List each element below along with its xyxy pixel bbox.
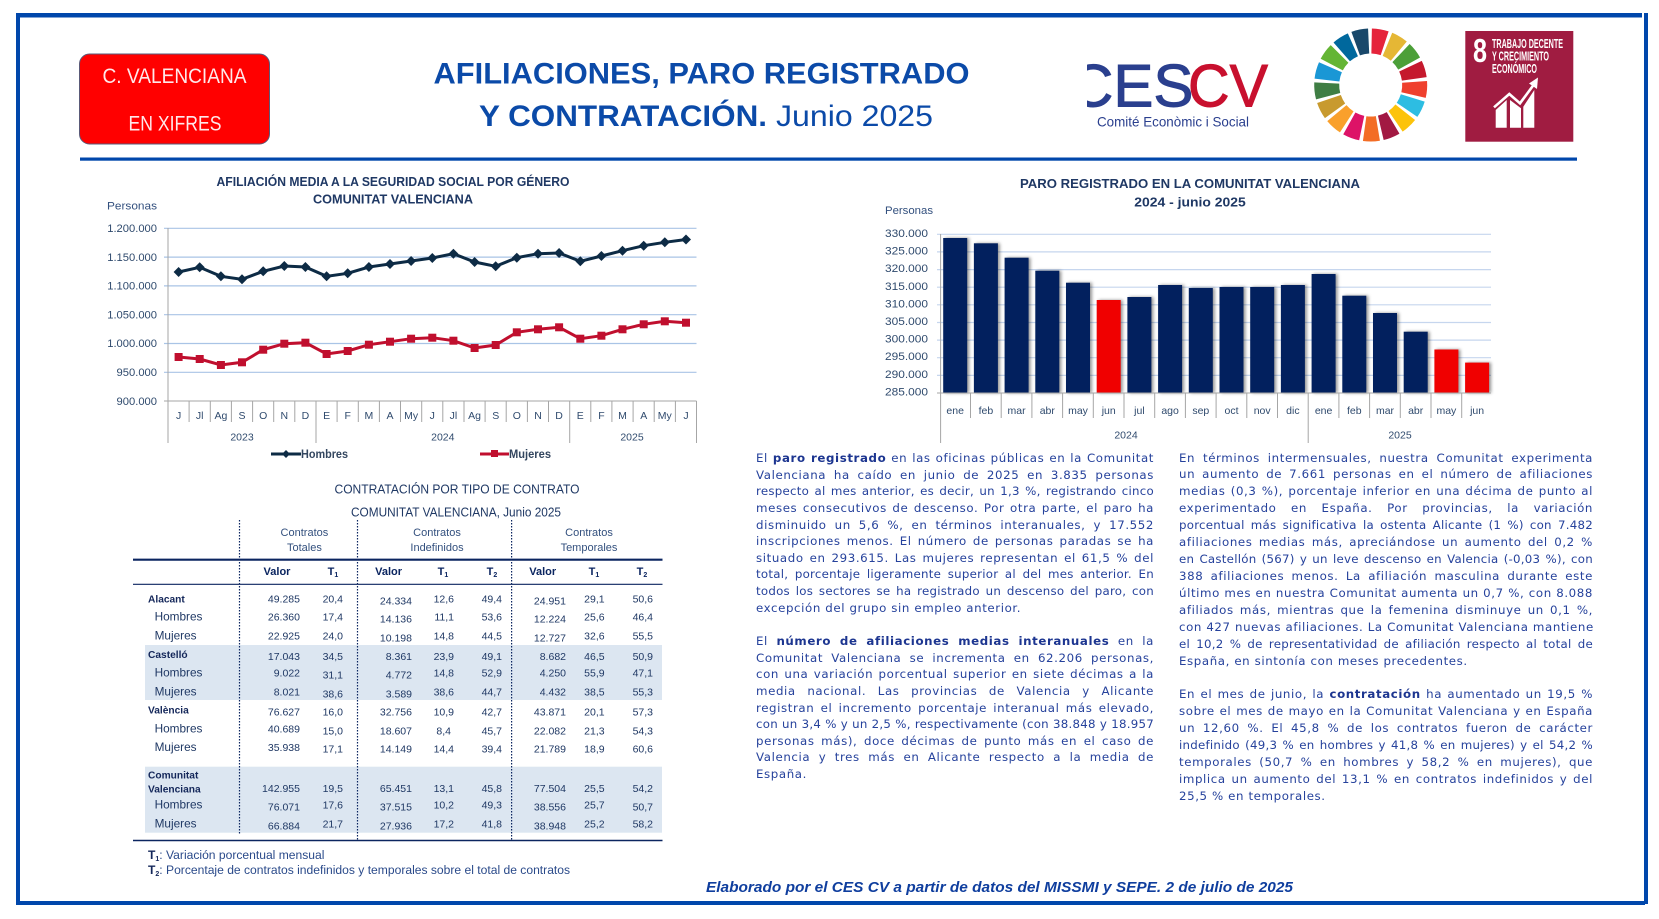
- table values: 49,1: [482, 651, 502, 663]
- table values: 8.021: [274, 687, 300, 699]
- table values: 66.884: [268, 821, 300, 833]
- table values: 9.022: [274, 668, 300, 680]
- table: contratación por tipo de contrato: 2: [643, 572, 647, 579]
- table values: 22.082: [534, 726, 566, 738]
- table values: 8.361: [386, 651, 412, 663]
- table values: 25,2: [584, 819, 605, 831]
- table values: 29,1: [584, 593, 605, 605]
- table values: 24.334: [380, 596, 412, 608]
- table values: 38,6: [434, 687, 454, 699]
- table values: 38.948: [534, 821, 566, 833]
- table values: 17,2: [434, 819, 454, 831]
- icon: SDG 8 tile: [1465, 31, 1573, 142]
- line chart heading: AFILIACIÓN MEDIA A LA SEGURIDAD SOCIAL POR GÉNERO: [216, 174, 570, 189]
- table: contratación por tipo de contrato: [133, 481, 662, 878]
- table values: 46,4: [633, 612, 653, 624]
- table values: 18,9: [584, 744, 605, 756]
- line chart month labels: Jl: [196, 410, 203, 422]
- table values: 21,3: [584, 726, 605, 738]
- table: contratación por tipo de contrato: T: [438, 566, 444, 578]
- table row labels: Mujeres: [155, 685, 197, 699]
- table: contratación por tipo de contrato: 2: [493, 572, 497, 579]
- bar chart month labels: jun: [1101, 405, 1116, 417]
- table values: 20,4: [323, 593, 343, 605]
- table values: 17.043: [268, 651, 300, 663]
- line chart month labels: M: [365, 410, 373, 422]
- table values: 77.504: [534, 783, 566, 795]
- table values: 45,8: [482, 783, 502, 795]
- table values: 10.198: [380, 633, 412, 645]
- line chart month labels: My: [404, 410, 419, 422]
- bar chart y axis labels: 300.000: [885, 334, 928, 346]
- table heading: [334, 481, 580, 519]
- bar chart month labels: oct: [1224, 405, 1239, 417]
- table values: 57,3: [633, 707, 653, 719]
- table row labels: Mujeres: [155, 817, 197, 831]
- table values: 16,0: [323, 707, 343, 719]
- table values: 43.871: [534, 707, 566, 719]
- table values: 4.432: [540, 687, 566, 699]
- bar chart month labels: ene: [946, 405, 964, 417]
- text block: términos intermensuales: [1179, 450, 1594, 668]
- table values: 50,6: [633, 593, 653, 605]
- bar chart month labels: mar: [1008, 405, 1026, 417]
- text block: afiliaciones medias: Valencia y tres más en Alicante respecto a la media de: [756, 750, 1154, 764]
- table heading: CONTRATACIÓN POR TIPO DE CONTRATO: [334, 481, 580, 496]
- table values: 45,7: [482, 726, 502, 738]
- table values: 25,7: [584, 800, 605, 812]
- table values: 39,4: [482, 744, 502, 756]
- bar chart heading: [1020, 176, 1361, 209]
- table: contratación por tipo de contrato: 1: [444, 572, 448, 579]
- bar chart month labels: may: [1068, 405, 1089, 417]
- series: Mujeres: [179, 321, 686, 365]
- table values: 14.149: [380, 744, 412, 756]
- table values: 32,6: [584, 631, 605, 643]
- line chart y axis labels: 1.100.000: [107, 281, 157, 293]
- bar chart month labels: ene: [1315, 405, 1333, 417]
- table values: 13,1: [434, 783, 454, 795]
- table values: 44,7: [482, 687, 502, 699]
- table footnotes: : Porcentaje de contratos indefinidos y temporales sobre el total de contratos: [159, 863, 570, 877]
- table: contratación por tipo de contrato: T: [637, 566, 643, 578]
- bar chart y axis labels: 305.000: [885, 316, 928, 328]
- table: contratación por tipo de contrato: Valor: [375, 566, 403, 578]
- table row labels: Comunitat: [148, 771, 199, 782]
- text block: contratación: sobre el mes de mayo en la Comunitat Valenciana y en España: [1179, 704, 1593, 718]
- table values: 20,1: [584, 707, 605, 719]
- bar chart y axis labels: 325.000: [885, 246, 928, 258]
- text block: afiliaciones medias: [756, 634, 1154, 781]
- table column headers: Totales: [287, 542, 322, 554]
- table values: 38,6: [323, 688, 343, 700]
- table values: 49,4: [482, 593, 502, 605]
- table row labels: Alacant: [148, 595, 185, 606]
- table values: 53,6: [482, 612, 502, 624]
- line chart month labels: O: [259, 410, 267, 422]
- table footnotes: T: [148, 863, 159, 878]
- line chart month labels: D: [555, 410, 563, 422]
- text block: afiliaciones medias: con un 3,4 % y un 2,5 %, respectivamente (con 38.848 y 18.957: [756, 717, 1154, 731]
- table values: 12,6: [434, 593, 454, 605]
- text block: afiliaciones medias: El número de afiliaciones medias interanuales en la: [756, 634, 1154, 648]
- table values: 11,1: [434, 612, 454, 624]
- table values: 21.789: [534, 744, 566, 756]
- line chart month labels: O: [513, 410, 521, 422]
- table values: 14,8: [434, 631, 454, 643]
- bars: [943, 238, 1489, 393]
- line chart month labels: J: [683, 410, 689, 422]
- table: contratación por tipo de contrato: T: [487, 566, 493, 578]
- table values: 24.951: [534, 596, 566, 608]
- line chart month labels: 2024: [431, 432, 455, 444]
- table row labels: Hombres: [155, 798, 203, 812]
- text block: términos intermensuales: 388 afiliaciones menos. La afiliación masculina durante este: [1179, 569, 1593, 583]
- table values: 49.285: [268, 593, 300, 605]
- table values: 41,8: [482, 819, 502, 831]
- line chart month labels: 2025: [620, 432, 644, 444]
- table row labels: Hombres: [155, 610, 203, 624]
- table column headers: Contratos: [565, 527, 613, 539]
- text block: paro registrado: todos los sectores se ha registrado un descenso del paro, con: [756, 584, 1154, 598]
- logo: CES CV: [1087, 64, 1268, 126]
- line chart legend: Mujeres: [509, 449, 551, 461]
- table values: 38.556: [534, 802, 566, 814]
- line chart y axis labels: 1.050.000: [107, 309, 157, 321]
- text block: términos intermensuales: afiliaciones medias más, apreciándose un aumento del 0,2 %: [1179, 535, 1593, 549]
- bar chart: paro registrado: [885, 176, 1491, 443]
- text block: contratación: indefinido (49,3 % en hombres y 41,8 % en mujeres) y el 54,2 %: [1179, 738, 1593, 752]
- line chart month labels: F: [344, 410, 351, 422]
- line chart month labels: [176, 410, 689, 444]
- line chart month labels: Ag: [214, 410, 227, 422]
- bar chart y axis labels: 310.000: [885, 298, 928, 310]
- text block: términos intermensuales: medias (0,3 %), porcentaje inferior en una décima de punto al: [1179, 484, 1593, 498]
- table row labels: Mujeres: [155, 740, 197, 754]
- table values: 47,1: [633, 668, 653, 680]
- text block: contratación: temporales (50,7 % en hombres y 58,2 % en mujeres), que: [1179, 755, 1593, 769]
- table footnotes: T: [148, 848, 159, 863]
- table values: 54,2: [633, 783, 653, 795]
- bar chart month labels: sep: [1192, 405, 1209, 417]
- bar chart month labels: jun: [1469, 405, 1484, 417]
- line chart y axis labels: 950.000: [117, 367, 157, 379]
- table values: 31,1: [323, 670, 343, 682]
- text block: paro registrado: situado en 293.615. Las mujeres representan el 61,5 % del: [756, 551, 1154, 565]
- icon: SDG 8 tile: 8: [1473, 32, 1487, 69]
- line chart y axis labels: 1.200.000: [107, 223, 157, 235]
- bar chart heading: PARO REGISTRADO EN LA COMUNITAT VALENCIANA: [1020, 176, 1361, 191]
- line chart month labels: S: [238, 410, 246, 422]
- badge: C. Valenciana en xifres: [80, 54, 270, 144]
- table values: 10,9: [434, 707, 454, 719]
- text block: paro registrado: El paro registrado en las oficinas públicas en la Comunitat: [756, 451, 1154, 465]
- table values: 8.682: [540, 651, 566, 663]
- line chart month labels: S: [492, 410, 499, 422]
- table column headers: [281, 527, 618, 554]
- table column headers: Contratos: [281, 527, 329, 539]
- table values: 55,3: [633, 687, 653, 699]
- table row labels: Valenciana: [148, 785, 201, 796]
- line chart month labels: Jl: [450, 410, 457, 422]
- icon: SDG colour wheel: [1308, 23, 1433, 147]
- table values: 52,9: [482, 668, 502, 680]
- text block: términos intermensuales: en Castellón (567) y un leve descenso en Valencia (-0,03 %), con: [1179, 552, 1593, 566]
- table values: 25,5: [584, 783, 605, 795]
- table values: 14.136: [380, 614, 412, 626]
- bar chart heading: 2024 - junio 2025: [1134, 194, 1246, 209]
- table values: 3.589: [386, 688, 412, 700]
- text block: paro registrado: [756, 451, 1154, 615]
- table row labels: Hombres: [155, 722, 203, 736]
- table footnotes: 2: [155, 871, 159, 878]
- text block: términos intermensuales: España, en sintonía con meses precedentes.: [1179, 654, 1468, 668]
- line chart legend: Hombres: [301, 449, 348, 461]
- table values: 76.071: [268, 802, 300, 814]
- bar chart y axis labels: 285.000: [885, 386, 928, 398]
- footer source note: Elaborado por el CES CV a partir de datos del MISSMI y SEPE. 2 de julio de 2025: [706, 880, 1294, 896]
- line chart y axis labels: [107, 201, 157, 408]
- table values: 22.925: [268, 631, 300, 643]
- table values: 65.451: [380, 783, 412, 795]
- table row labels: València: [148, 706, 189, 717]
- table values: 19,5: [323, 783, 343, 795]
- bar chart month labels: mar: [1376, 405, 1395, 417]
- table values: 8,4: [436, 726, 451, 738]
- table: contratación por tipo de contrato: T: [328, 566, 334, 578]
- table values: 21,7: [323, 819, 343, 831]
- bar chart y axis labels: 295.000: [885, 351, 928, 363]
- line chart month labels: J: [430, 410, 435, 422]
- table values: 25,6: [584, 612, 605, 624]
- table values: 38,5: [584, 687, 605, 699]
- text block: términos intermensuales: un aumento de 7.661 personas en el número de afiliaciones: [1179, 467, 1593, 481]
- table footnotes: [148, 848, 570, 878]
- table values: 10,2: [434, 800, 454, 812]
- line chart y axis labels: Personas: [107, 201, 157, 213]
- text block: afiliaciones medias: Comunitat Valenciana se incrementa en 62.206 personas,: [756, 651, 1154, 665]
- badge: C. Valenciana en xifres: EN XIFRES: [128, 112, 222, 136]
- table values: 24,0: [323, 631, 343, 643]
- table values: 44,5: [482, 631, 502, 643]
- table values: 17,4: [323, 612, 343, 624]
- bar chart month labels: may: [1436, 405, 1457, 417]
- text block: términos intermensuales: con 427 nuevas afiliaciones. La Comunitat Valenciana mantiene: [1179, 620, 1594, 634]
- table values: 12.727: [534, 633, 566, 645]
- table row labels: Castelló: [148, 650, 188, 661]
- logo: CES CV: CES: [1070, 52, 1193, 120]
- text block: contratación: un 12,60 %. El 45,8 % de los contratos fueron de carácter: [1179, 721, 1593, 735]
- text block: paro registrado: Valenciana ha caído en junio de 2025 en 3.835 personas: [756, 468, 1154, 482]
- table: contratación por tipo de contrato: 1: [334, 572, 338, 579]
- table values: 14,8: [434, 668, 454, 680]
- table values: 55,9: [584, 668, 605, 680]
- text block: contratación: implica un aumento del 13,1 % en contratos indefinidos y del: [1179, 772, 1593, 786]
- table values: 32.756: [380, 707, 412, 719]
- line chart y axis labels: 1.150.000: [107, 252, 157, 264]
- line chart month labels: 2023: [230, 432, 254, 444]
- line chart: afiliación media: [107, 174, 696, 461]
- table values: 27.936: [380, 821, 412, 833]
- table values: 34,5: [323, 651, 343, 663]
- line chart month labels: M: [618, 410, 627, 422]
- table values: 4.772: [386, 670, 412, 682]
- logo: CES CV: Comité Econòmic i Social: [1097, 114, 1249, 130]
- line chart month labels: A: [386, 410, 394, 422]
- text block: paro registrado: inscripciones menos. El número de personas paradas se ha: [756, 534, 1154, 548]
- text block: paro registrado: meses consecutivos de descenso. Por otra parte, el paro ha: [756, 501, 1154, 515]
- table values: 58,2: [633, 819, 653, 831]
- table: contratación por tipo de contrato: T: [589, 566, 595, 578]
- text block: contratación: En el mes de junio, la contratación ha aumentado un 19,5 %: [1179, 687, 1593, 701]
- line chart heading: [216, 174, 570, 207]
- text block: contratación: 25,5 % en temporales.: [1179, 789, 1326, 803]
- bar chart y axis labels: 330.000: [885, 228, 928, 240]
- table values: 76.627: [268, 707, 300, 719]
- text block: términos intermensuales: porcentual más significativa la ostenta Alicante (1 %) con 7.482: [1179, 518, 1593, 532]
- text block: afiliaciones medias: registran el incremento porcentaje interanual más elevado,: [756, 700, 1154, 714]
- table values: 15,0: [323, 726, 343, 738]
- icon: SDG 8 tile: TRABAJO DECENTE: [1492, 37, 1563, 51]
- text block: términos intermensuales: el 10,2 % de representatividad de afiliación respecto al total de: [1179, 637, 1593, 651]
- table values: 26.360: [268, 612, 300, 624]
- bar chart y axis labels: 290.000: [885, 369, 928, 381]
- table values: 60,6: [633, 744, 653, 756]
- text block: términos intermensuales: En términos intermensuales, nuestra Comunitat experimenta: [1179, 450, 1593, 464]
- line chart month labels: N: [281, 410, 288, 422]
- title: Y CONTRATACIÓN.: [479, 99, 767, 133]
- text block: paro registrado: total, porcentaje ligeramente superior al del mes anterior. En: [756, 567, 1154, 581]
- line chart legend: [271, 449, 551, 461]
- bar chart month labels: abr: [1040, 405, 1055, 417]
- bar chart y axis labels: Personas: [885, 205, 933, 217]
- table values: 4.250: [540, 668, 566, 680]
- table column headers: Contratos: [413, 527, 461, 539]
- table values: 49,3: [482, 800, 502, 812]
- line chart month labels: A: [640, 410, 647, 422]
- table values: 17,6: [323, 800, 343, 812]
- title: AFILIACIONES, PARO REGISTRADO: [434, 58, 970, 90]
- table values: 14,4: [434, 744, 454, 756]
- bar chart month labels: feb: [1347, 405, 1362, 417]
- bar chart month labels: [946, 405, 1484, 442]
- table values: [262, 593, 653, 833]
- bar chart month labels: ago: [1161, 405, 1179, 417]
- table footnotes: 1: [155, 856, 159, 863]
- table column headers: Temporales: [561, 542, 618, 554]
- line chart month labels: J: [176, 410, 181, 422]
- bar chart month labels: feb: [979, 405, 993, 417]
- table: contratación por tipo de contrato: Valor: [529, 566, 557, 578]
- header rule: [80, 158, 1577, 161]
- bar chart month labels: 2024: [1114, 430, 1138, 442]
- table row labels: Mujeres: [155, 629, 197, 643]
- bar chart month labels: abr: [1408, 405, 1424, 417]
- line chart month labels: F: [598, 410, 605, 422]
- table values: 142.955: [262, 783, 300, 795]
- text block: afiliaciones medias: media nacional. Las provincias de Valencia y Alicante: [756, 684, 1154, 698]
- line chart heading: COMUNITAT VALENCIANA: [313, 192, 474, 207]
- text block: términos intermensuales: afiliados más, mientras que la femenina disminuye un 0,1 %,: [1179, 603, 1593, 617]
- icon: SDG 8 tile: Y CRECIMIENTO: [1492, 50, 1549, 64]
- badge: C. Valenciana en xifres: C. VALENCIANA: [102, 65, 246, 88]
- line chart y axis labels: 900.000: [117, 396, 157, 408]
- icon: SDG 8 tile: ECONÓMICO: [1492, 61, 1537, 76]
- table values: 55,5: [633, 631, 653, 643]
- logo: CES CV: CV: [1188, 52, 1268, 120]
- table row labels: [148, 595, 203, 831]
- line chart month labels: Ag: [468, 410, 481, 422]
- table heading: COMUNITAT VALENCIANA, Junio 2025: [351, 505, 561, 519]
- title: [434, 58, 970, 133]
- line chart y axis labels: 1.000.000: [107, 338, 157, 350]
- table footnotes: : Variación porcentual mensual: [159, 848, 324, 862]
- line chart month labels: N: [534, 410, 542, 422]
- bar chart y axis labels: 315.000: [885, 281, 928, 293]
- title: Junio 2025: [776, 100, 933, 133]
- table values: 54,3: [633, 726, 653, 738]
- table values: 40.689: [268, 724, 300, 736]
- line chart month labels: E: [323, 410, 330, 422]
- series: Hombres: [179, 240, 686, 279]
- bar chart month labels: jul: [1133, 405, 1145, 417]
- table: contratación por tipo de contrato: Valor: [264, 566, 291, 578]
- text block: afiliaciones medias: España.: [756, 767, 807, 781]
- table row labels: Hombres: [155, 666, 203, 680]
- bar chart month labels: 2025: [1388, 430, 1412, 442]
- table values: 42,7: [482, 707, 502, 719]
- text block: paro registrado: disminuido un 5,6 %, en términos interanuales, y 17.552: [756, 518, 1154, 532]
- line chart month labels: E: [577, 410, 584, 422]
- table values: 46,5: [584, 651, 605, 663]
- text block: afiliaciones medias: con una variación porcentual superior en siete décimas a la: [756, 667, 1154, 681]
- table values: 12.224: [534, 614, 566, 626]
- text block: paro registrado: respecto al mes anterior, es decir, un 1,3 %, registrando cinco: [756, 484, 1154, 498]
- bar chart month labels: nov: [1254, 405, 1271, 417]
- table values: 17,1: [323, 744, 343, 756]
- line chart month labels: D: [302, 410, 310, 422]
- bar chart month labels: dic: [1286, 405, 1300, 417]
- text block: términos intermensuales: último mes en nuestra Comunitat aumenta un 0,7 %, con 8.088: [1179, 586, 1593, 600]
- line chart month labels: My: [658, 410, 673, 422]
- table values: 37.515: [380, 802, 412, 814]
- table column headers: Indefinidos: [410, 542, 464, 554]
- table values: 35.938: [268, 742, 300, 754]
- table values: 50,7: [633, 802, 653, 814]
- bar chart y axis labels: 320.000: [885, 263, 928, 275]
- text block: afiliaciones medias: personas más), doce décimas de punto más en el caso de: [756, 734, 1154, 748]
- text block: contratación: [1179, 687, 1593, 803]
- text block: términos intermensuales: experimentado en España. Por provincias, la variación: [1179, 501, 1593, 515]
- table values: 50,9: [633, 651, 653, 663]
- table: contratación por tipo de contrato: 1: [595, 572, 599, 579]
- table values: 18.607: [380, 726, 412, 738]
- bar chart y axis labels: [885, 205, 933, 398]
- table values: 23,9: [434, 651, 454, 663]
- text block: paro registrado: excepción del grupo sin empleo anterior.: [756, 601, 1021, 615]
